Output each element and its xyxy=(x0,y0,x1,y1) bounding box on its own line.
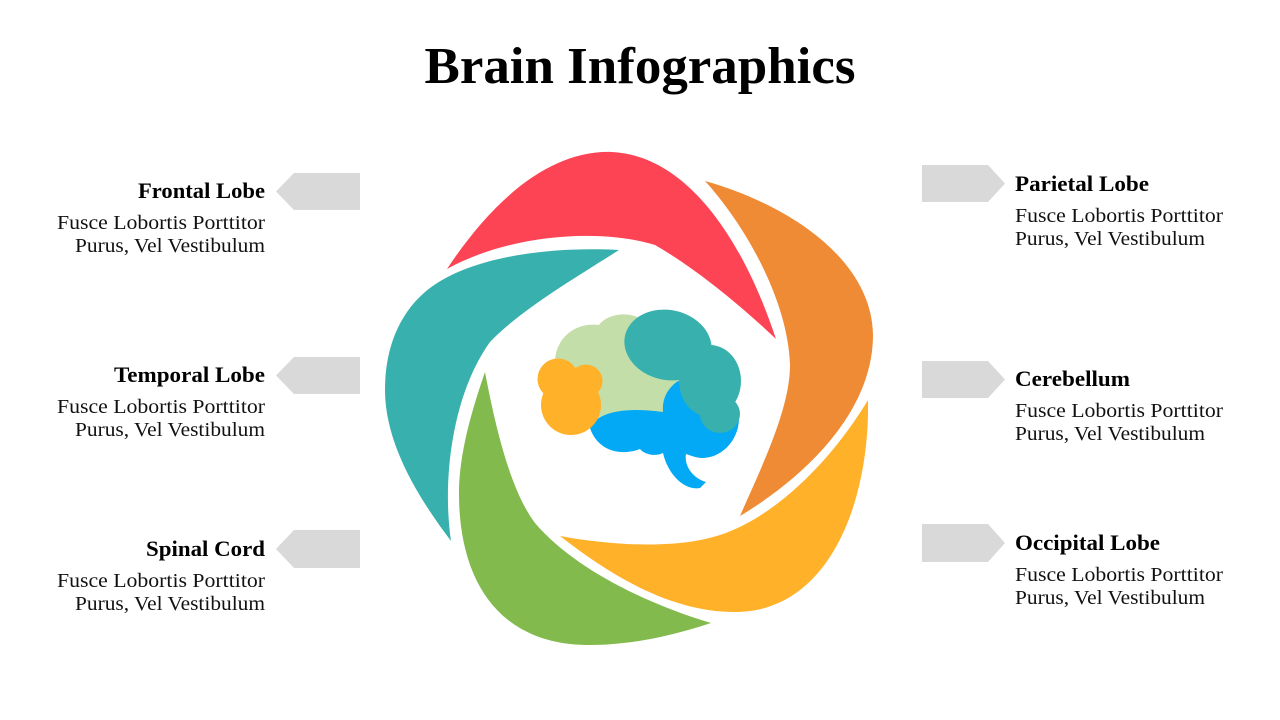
arrow: temporal lobe xyxy=(276,357,360,394)
brain: pale green lobe xyxy=(555,314,682,425)
text: spinal cord description xyxy=(57,570,265,615)
text: cerebellum description: Purus, Vel Vestibulum xyxy=(1015,423,1205,445)
arrow: spinal cord xyxy=(276,530,360,568)
text: frontal lobe description: Purus, Vel Vestibulum xyxy=(75,235,265,257)
brain: blue lobe xyxy=(590,381,739,488)
arrow: frontal lobe xyxy=(276,173,360,210)
text: frontal lobe description xyxy=(57,212,265,257)
text: temporal lobe description xyxy=(57,396,265,441)
petal: yellow xyxy=(560,400,868,612)
text: occipital lobe description: Purus, Vel Vestibulum xyxy=(1015,587,1205,609)
panel: temporal lobe xyxy=(57,357,360,441)
text: cerebellum description: Fusce Lobortis Porttitor xyxy=(1015,400,1223,422)
heading: spinal cord: Spinal Cord xyxy=(146,536,265,561)
text: parietal lobe description: Purus, Vel Vestibulum xyxy=(1015,228,1205,250)
text: occipital lobe description xyxy=(1015,564,1223,609)
arrow: cerebellum xyxy=(922,361,1005,398)
heading: temporal lobe: Temporal Lobe xyxy=(114,362,265,387)
text: temporal lobe description: Purus, Vel Vestibulum xyxy=(75,419,265,441)
text: occipital lobe description: Fusce Lobortis Porttitor xyxy=(1015,564,1223,586)
text: parietal lobe description: Fusce Lobortis Porttitor xyxy=(1015,205,1223,227)
arrow: occipital lobe xyxy=(922,524,1005,562)
text: spinal cord description: Purus, Vel Vestibulum xyxy=(75,593,265,615)
heading: occipital lobe: Occipital Lobe xyxy=(1015,530,1160,555)
panel: spinal cord xyxy=(57,530,360,615)
text: cerebellum description xyxy=(1015,400,1223,445)
petal: green xyxy=(459,372,711,645)
brain: orange lobe xyxy=(538,358,602,435)
heading: parietal lobe: Parietal Lobe xyxy=(1015,171,1149,196)
title: Brain Infographics xyxy=(424,38,856,95)
text: spinal cord description: Fusce Lobortis Porttitor xyxy=(57,570,265,592)
arrow: parietal lobe xyxy=(922,165,1005,202)
petal: red xyxy=(447,152,776,339)
icon: brain xyxy=(538,302,741,488)
petal: orange xyxy=(705,181,873,516)
panel: occipital lobe xyxy=(922,524,1223,609)
panel: cerebellum xyxy=(922,361,1223,445)
brain: teal lobe xyxy=(618,302,741,433)
heading: cerebellum: Cerebellum xyxy=(1015,366,1130,391)
diagram: five-petal swirl xyxy=(385,152,873,645)
heading: frontal lobe: Frontal Lobe xyxy=(138,178,265,203)
panel: frontal lobe xyxy=(57,173,360,257)
text: temporal lobe description: Fusce Lobortis Porttitor xyxy=(57,396,265,418)
panel: parietal lobe xyxy=(922,165,1223,250)
text: frontal lobe description: Fusce Lobortis Porttitor xyxy=(57,212,265,234)
text: parietal lobe description xyxy=(1015,205,1223,250)
petal: teal xyxy=(385,249,619,541)
